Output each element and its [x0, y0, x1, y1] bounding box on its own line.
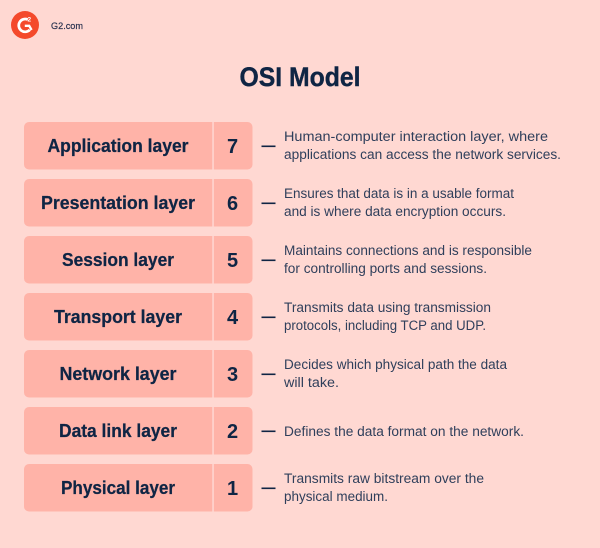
layer 3 row: Decides which physical path the data: [284, 357, 507, 372]
layer 3 row: 3: [227, 364, 238, 386]
layer 6 row: [24, 179, 514, 226]
layer 7 row: [24, 122, 561, 170]
layer 3 row: will take.: [283, 375, 339, 390]
layer 5 row: Maintains connections and is responsible: [284, 243, 532, 258]
layer 5 row: for controlling ports and sessions.: [284, 261, 487, 276]
layer 3 row: Network layer: [60, 364, 176, 384]
layer 6 row: Ensures that data is in a usable format: [284, 186, 514, 201]
layer 6 row: and is where data encryption occurs.: [284, 204, 506, 219]
layer 5 row: Session layer: [62, 250, 174, 270]
title: OSI Model: [240, 62, 360, 92]
icon: G2 logo: 2: [28, 16, 32, 24]
layer 1 row: [24, 464, 484, 512]
layer 4 row: Transport layer: [54, 307, 182, 327]
layer 3 row: [24, 350, 507, 398]
layer 1 row: physical medium.: [284, 489, 388, 504]
layer 2 row: [24, 407, 524, 454]
layer 7 row: applications can access the network services.: [284, 147, 561, 162]
brand label: G2.com: [51, 21, 83, 32]
layer 1 row: 1: [227, 478, 238, 500]
layer 4 row: protocols, including TCP and UDP.: [284, 318, 486, 333]
layer 6 row: Presentation layer: [41, 193, 195, 213]
layer 7 row: Human-computer interaction layer, where: [284, 129, 548, 144]
layer 2 row: 2: [227, 421, 238, 443]
icon: G2 logo: [11, 11, 39, 39]
layer 2 row: Defines the data format on the network.: [284, 424, 524, 439]
layer 4 row: Transmits data using transmission: [284, 300, 491, 315]
layer 2 row: Data link layer: [59, 421, 177, 441]
layer 7 row: 7: [227, 136, 238, 158]
layer 7 row: Application layer: [48, 136, 188, 156]
layer 6 row: 6: [227, 193, 238, 215]
layer 5 row: 5: [227, 250, 238, 272]
layer 5 row: [24, 236, 532, 284]
layer 4 row: [24, 293, 491, 340]
layer 4 row: 4: [227, 307, 239, 329]
layer 1 row: Physical layer: [61, 478, 175, 498]
layer 1 row: Transmits raw bitstream over the: [284, 471, 484, 486]
